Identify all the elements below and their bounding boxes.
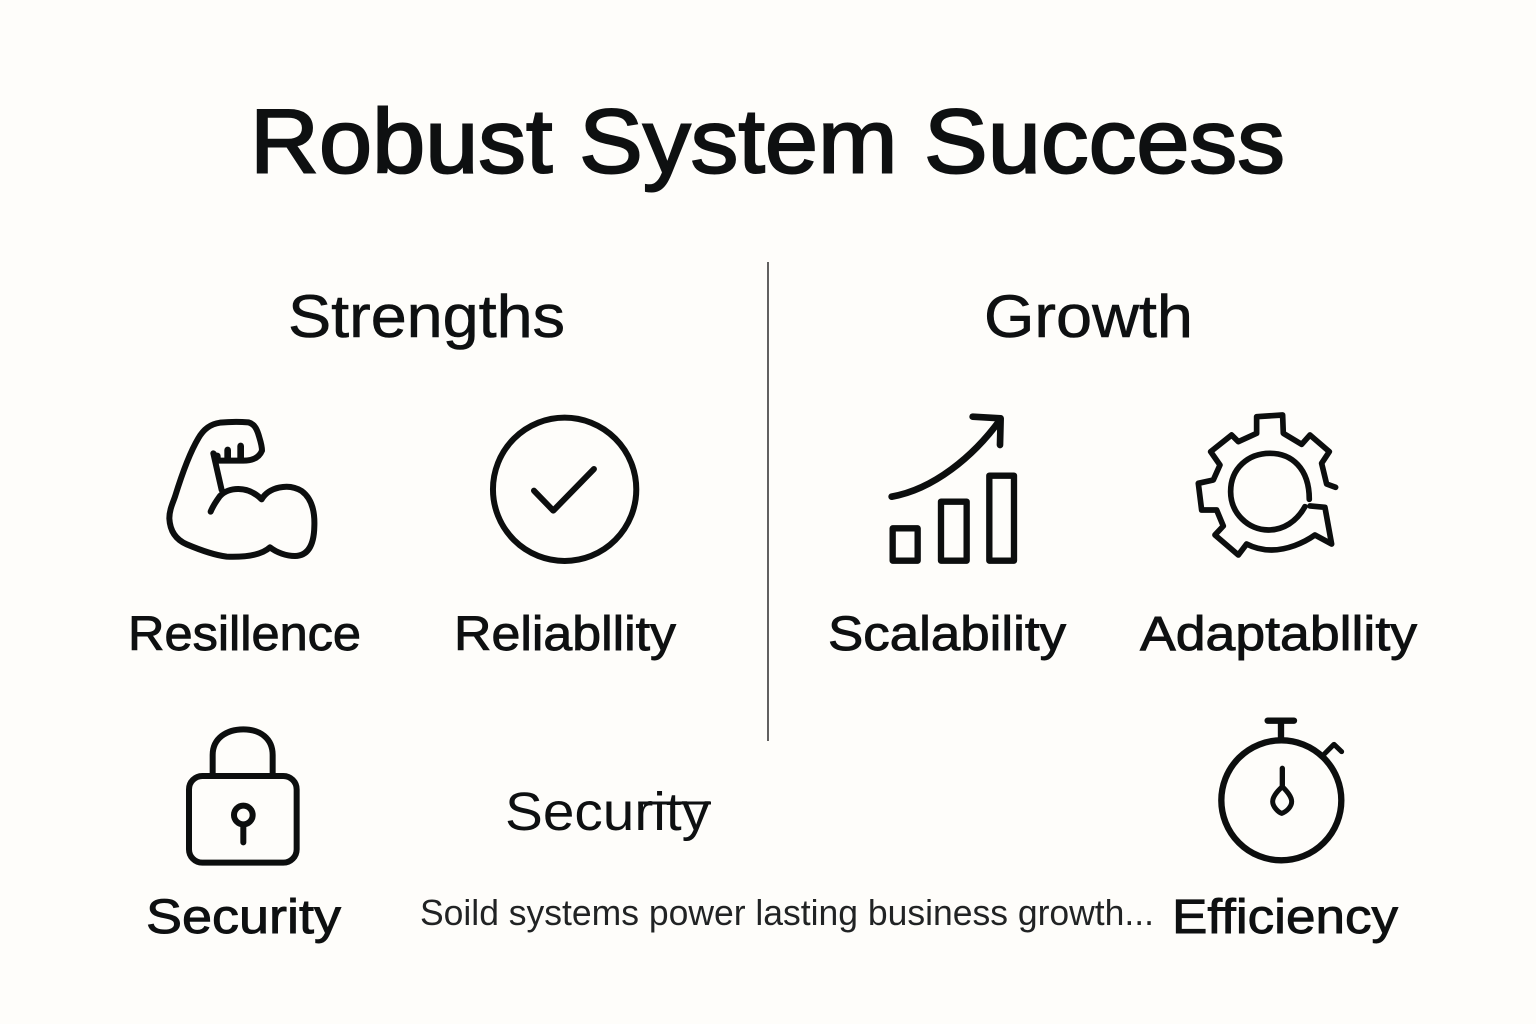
label: Efficiency: Efficiency	[1172, 891, 1398, 944]
heading: Strengths: Strengths	[288, 283, 565, 350]
label: Scalability: Scalability	[828, 608, 1066, 661]
icon: padlock	[189, 729, 297, 863]
label: Security: Security	[146, 891, 341, 944]
icon: stopwatch	[1221, 721, 1342, 860]
icon: bar chart with arrow	[892, 417, 1014, 561]
icon: gear with arrow	[1198, 415, 1336, 555]
label: Resillence: Resillence	[128, 608, 361, 661]
icon: flexed muscle	[169, 422, 314, 557]
label: Reliabllity: Reliabllity	[454, 608, 676, 661]
tagline: Soild systems power lasting business growth...	[420, 892, 1154, 933]
secondary Security text: Security	[505, 782, 710, 842]
heading: Growth: Growth	[984, 283, 1193, 350]
title: Robust System Success	[250, 92, 1285, 192]
label: Adaptabllity: Adaptabllity	[1140, 608, 1417, 661]
icon: check circle	[493, 418, 636, 561]
center divider	[767, 262, 769, 741]
